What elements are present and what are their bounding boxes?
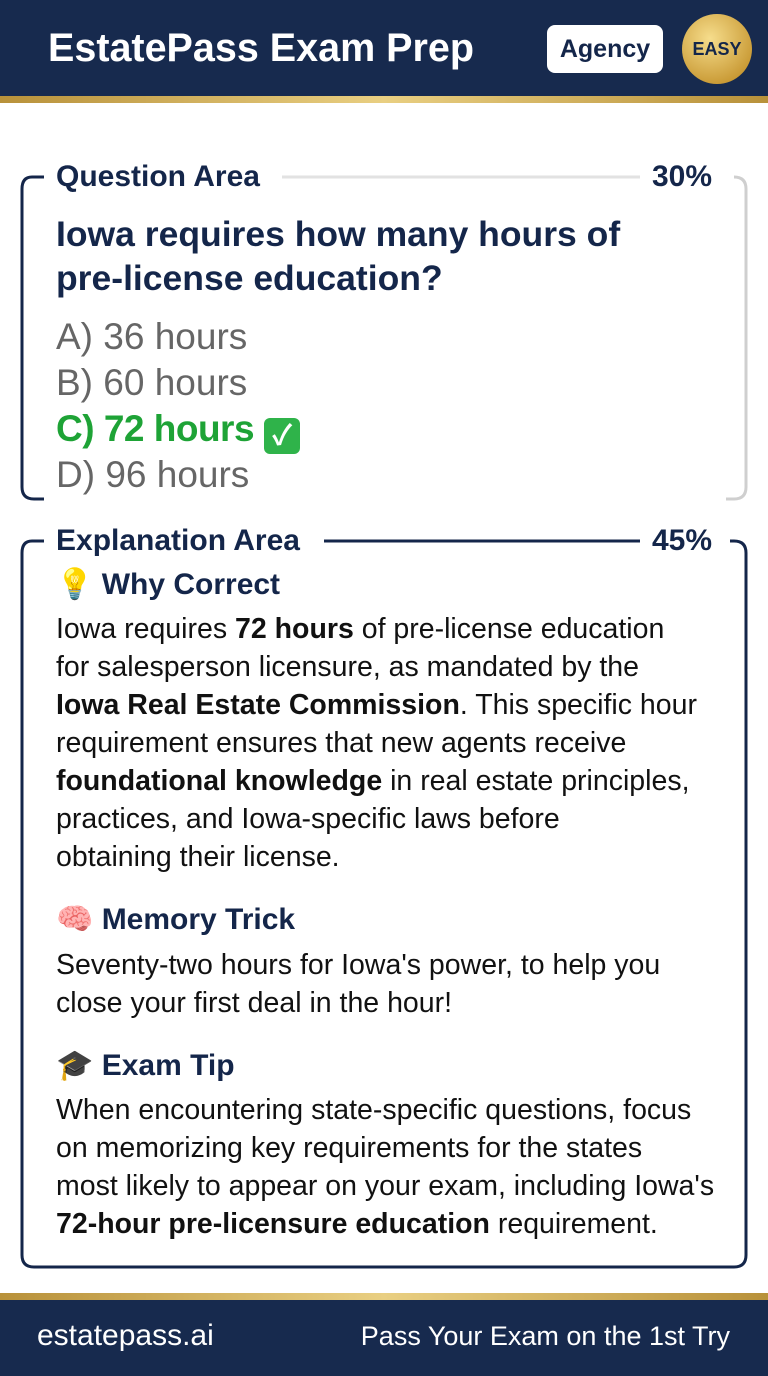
section: memory trick: Seventy-two hours for Iowa's power, to help you	[56, 949, 660, 981]
panel: explanation	[20, 524, 748, 1268]
panel: question	[20, 160, 748, 500]
answer options: C) 72 hours	[56, 408, 254, 449]
answer options: D) 96 hours	[56, 454, 249, 495]
answer options: A) 36 hours	[56, 316, 247, 357]
question text	[56, 214, 620, 298]
header bar	[0, 0, 768, 96]
percentage 45%: 45%	[652, 524, 712, 557]
badge: Agency: Agency	[560, 35, 650, 63]
footer url: estatepass.ai	[37, 1319, 214, 1352]
section: exam tip: on memorizing key requirements for the states	[56, 1132, 642, 1164]
badge: EASY seal: EASY	[692, 39, 742, 59]
section: exam tip	[56, 1049, 714, 1240]
section: why correct: practices, and Iowa-specific laws before	[56, 803, 560, 835]
section: memory trick: 🧠 Memory Trick	[56, 903, 295, 936]
title: EstatePass Exam Prep	[48, 26, 474, 70]
section: why correct	[56, 567, 697, 873]
section: why correct: Iowa requires 72 hours of pre-license education	[56, 613, 664, 645]
section: why correct: Iowa Real Estate Commission. This specific hour	[56, 689, 697, 721]
section: why correct: obtaining their license.	[56, 841, 340, 873]
footer tagline: Pass Your Exam on the 1st Try	[361, 1321, 730, 1351]
percentage 30%: 30%	[652, 160, 712, 193]
section: why correct: foundational knowledge in real estate principles,	[56, 765, 690, 797]
section: why correct: for salesperson licensure, as mandated by the	[56, 651, 639, 683]
answer options: B) 60 hours	[56, 362, 247, 403]
section: exam tip: 🎓 Exam Tip	[56, 1049, 235, 1082]
section: why correct: 💡 Why Correct	[56, 568, 280, 601]
question text: pre-license education?	[56, 258, 443, 298]
section: memory trick: close your first deal in the hour!	[56, 987, 452, 1019]
question text: Iowa requires how many hours of	[56, 214, 620, 254]
answer options	[56, 316, 300, 495]
section: memory trick	[56, 903, 660, 1019]
section: exam tip: most likely to appear on your exam, including Iowa's	[56, 1170, 714, 1202]
badge: EASY seal	[682, 14, 752, 84]
answer options: ✓	[272, 420, 292, 451]
heading: Explanation Area: Explanation Area	[56, 524, 300, 557]
section: exam tip: When encountering state-specific questions, focus	[56, 1094, 691, 1126]
heading: Question Area: Question Area	[56, 160, 260, 193]
section: why correct: requirement ensures that new agents receive	[56, 727, 626, 759]
badge: Agency	[547, 25, 663, 73]
footer	[0, 1300, 768, 1376]
section: exam tip: 72-hour pre-licensure education requirement.	[56, 1208, 658, 1240]
